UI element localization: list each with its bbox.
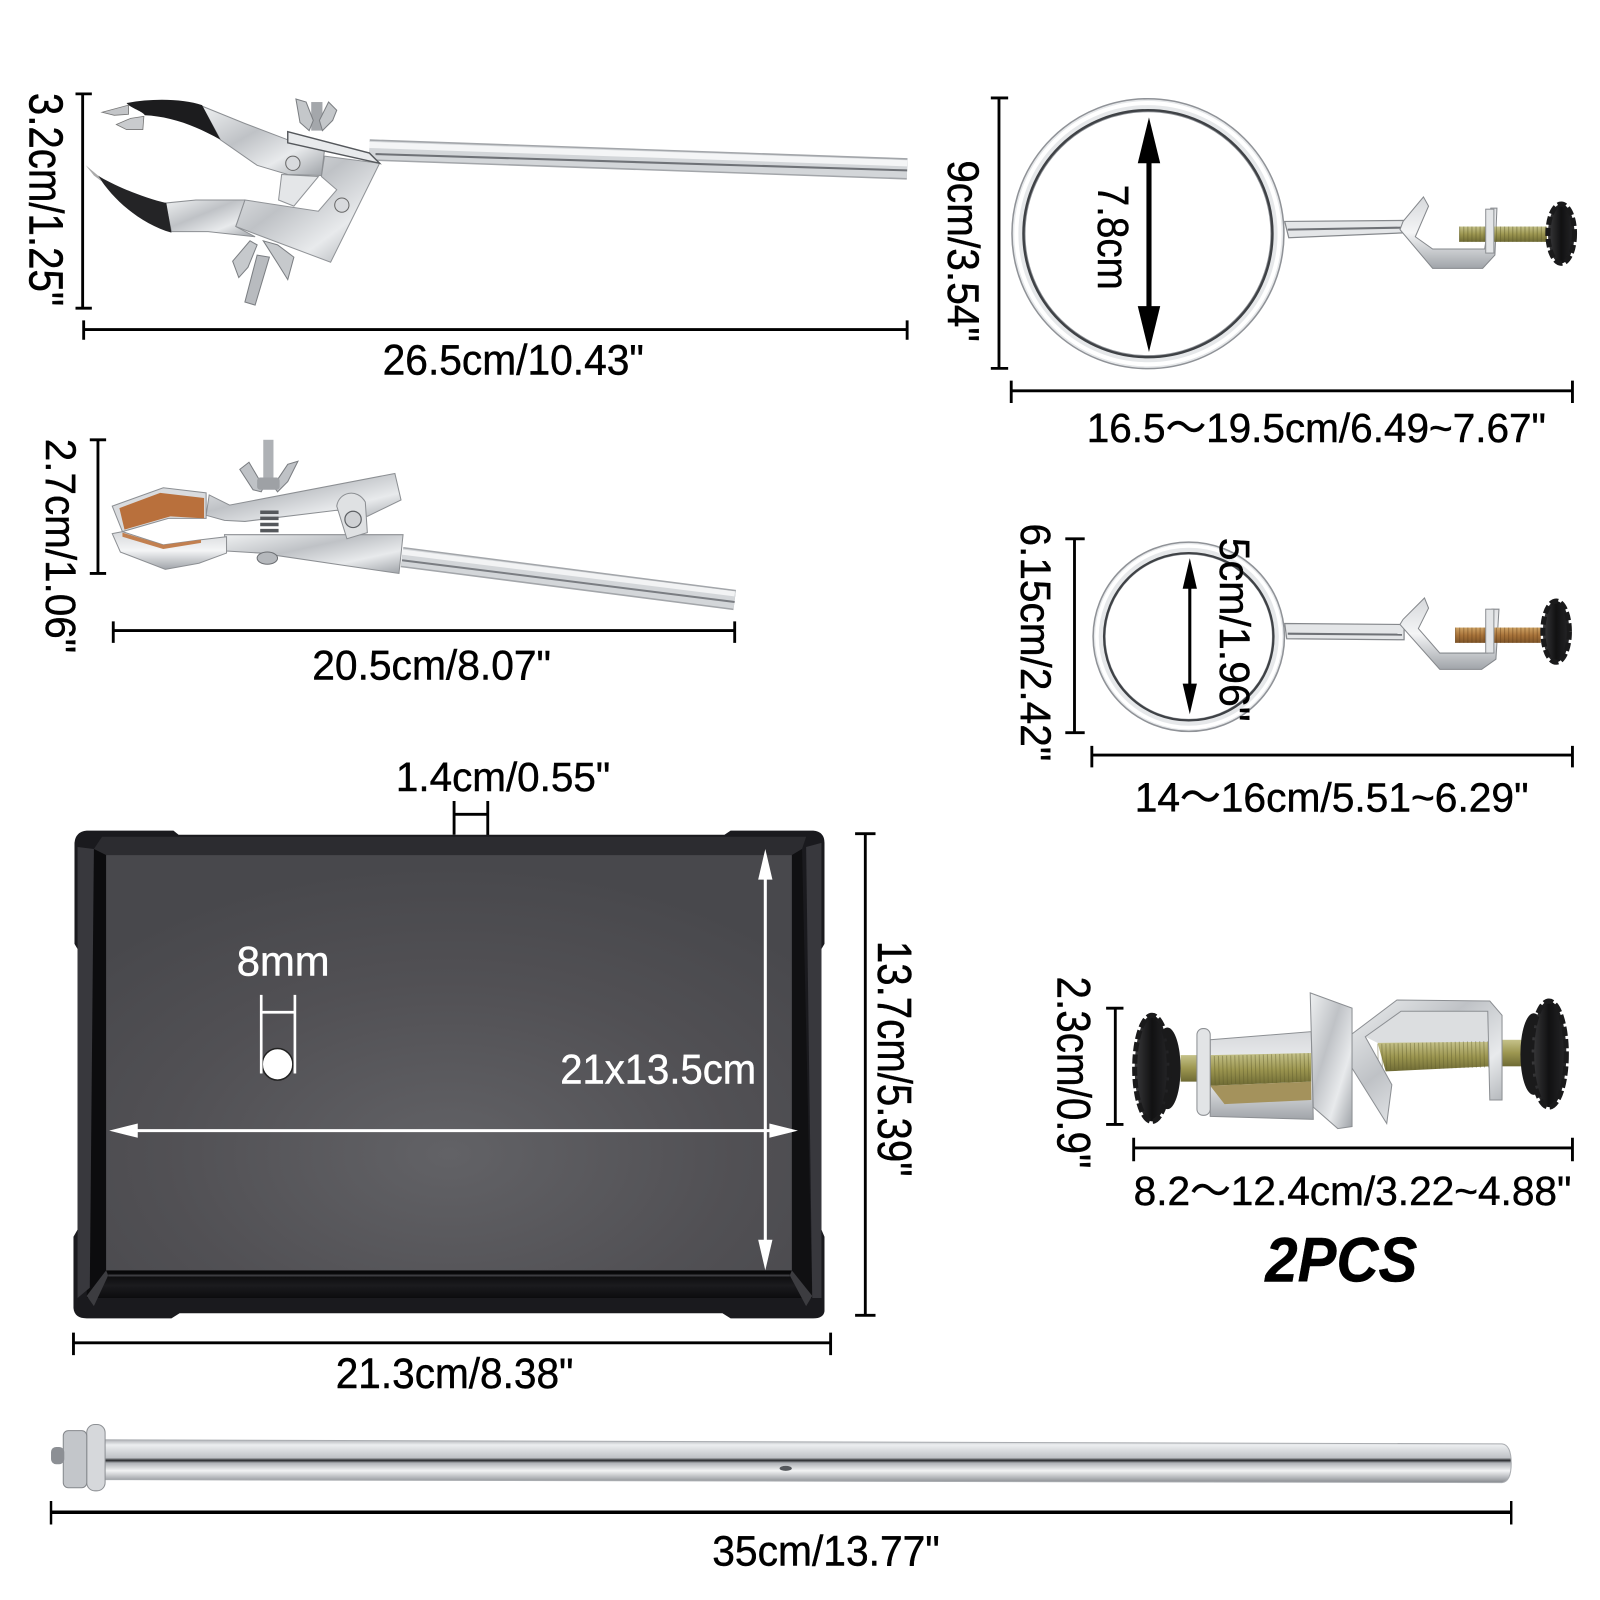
label: 8mm: 8mm xyxy=(237,938,330,985)
label: 16.5-19.5cm: 16.5～19.5cm/6.49~7.67" xyxy=(1087,405,1546,451)
dimension: 35cm main line xyxy=(51,1510,1511,1514)
label: 2.7cm/1.06: 2.7cm/1.06" xyxy=(36,439,84,653)
label: 14-16cm: 14～16cm/5.51~6.29" xyxy=(1135,775,1529,821)
label: 1.4cm/0.55: 1.4cm/0.55" xyxy=(396,754,610,800)
label: 7.8cm: 7.8cm xyxy=(1088,185,1137,290)
arrow: plate height xyxy=(758,849,772,1270)
dimension: 2.7cm height line xyxy=(90,440,106,573)
dimension: 26.5cm length line xyxy=(84,320,907,340)
dimension: 20.5cm length line xyxy=(113,621,735,643)
double boss head clamp xyxy=(1135,993,1566,1129)
dimension: 13.7cm height line xyxy=(855,834,876,1315)
label: 21.3cm/8.38: 21.3cm/8.38" xyxy=(336,1350,573,1398)
clamp: two-prong with cork lining xyxy=(112,440,735,602)
label: 3.2cm/1.25: 3.2cm/1.25" xyxy=(19,93,72,306)
label: 2.3cm/0.9: 2.3cm/0.9" xyxy=(1048,977,1100,1168)
label: 2PCS: 2PCS xyxy=(1264,1226,1417,1296)
dimension: 35cm length line xyxy=(51,1501,1511,1524)
label: 5cm/1.96: 5cm/1.96" xyxy=(1210,538,1258,721)
label: 26.5cm/10.43: 26.5cm/10.43" xyxy=(383,336,644,384)
dimension: 16.5-19.5cm length line xyxy=(1011,381,1572,403)
dimension: 21.3cm length line xyxy=(73,1333,831,1355)
clamp: three-prong with black sleeves xyxy=(86,99,907,305)
dimension: 1.4cm slot width xyxy=(454,801,488,853)
dimension: 9cm height line xyxy=(991,98,1008,368)
dimension: 2.3cm height line xyxy=(1106,1008,1123,1124)
small support ring with clamp xyxy=(1097,546,1569,728)
base plate tray xyxy=(73,831,824,1318)
label: 35cm/13.77: 35cm/13.77" xyxy=(712,1527,940,1575)
arrow: 7.8cm inner diameter xyxy=(1138,117,1160,352)
dimension: 6.15cm height line xyxy=(1065,539,1085,733)
threaded support rod xyxy=(51,1424,1511,1491)
dimension: 3.2cm height line xyxy=(76,94,92,308)
arrow: 5cm inner diameter xyxy=(1183,558,1197,714)
label: 6.15cm/2.42: 6.15cm/2.42" xyxy=(1011,523,1059,761)
label: 8.2-12.4cm: 8.2～12.4cm/3.22~4.88" xyxy=(1134,1168,1571,1214)
dimension: 8.2-12.4cm length line xyxy=(1134,1138,1572,1161)
label: 20.5cm/8.07: 20.5cm/8.07" xyxy=(312,642,551,689)
label: 9cm/3.54: 9cm/3.54" xyxy=(938,160,989,342)
large support ring with clamp xyxy=(1016,103,1574,364)
arrow: plate width xyxy=(109,1123,798,1138)
label: 13.7cm/5.39: 13.7cm/5.39" xyxy=(867,941,920,1177)
dimension: 14-16cm length line xyxy=(1092,746,1572,767)
bracket: 8mm hole width xyxy=(261,995,295,1073)
label: 21x13.5cm: 21x13.5cm xyxy=(560,1046,756,1093)
